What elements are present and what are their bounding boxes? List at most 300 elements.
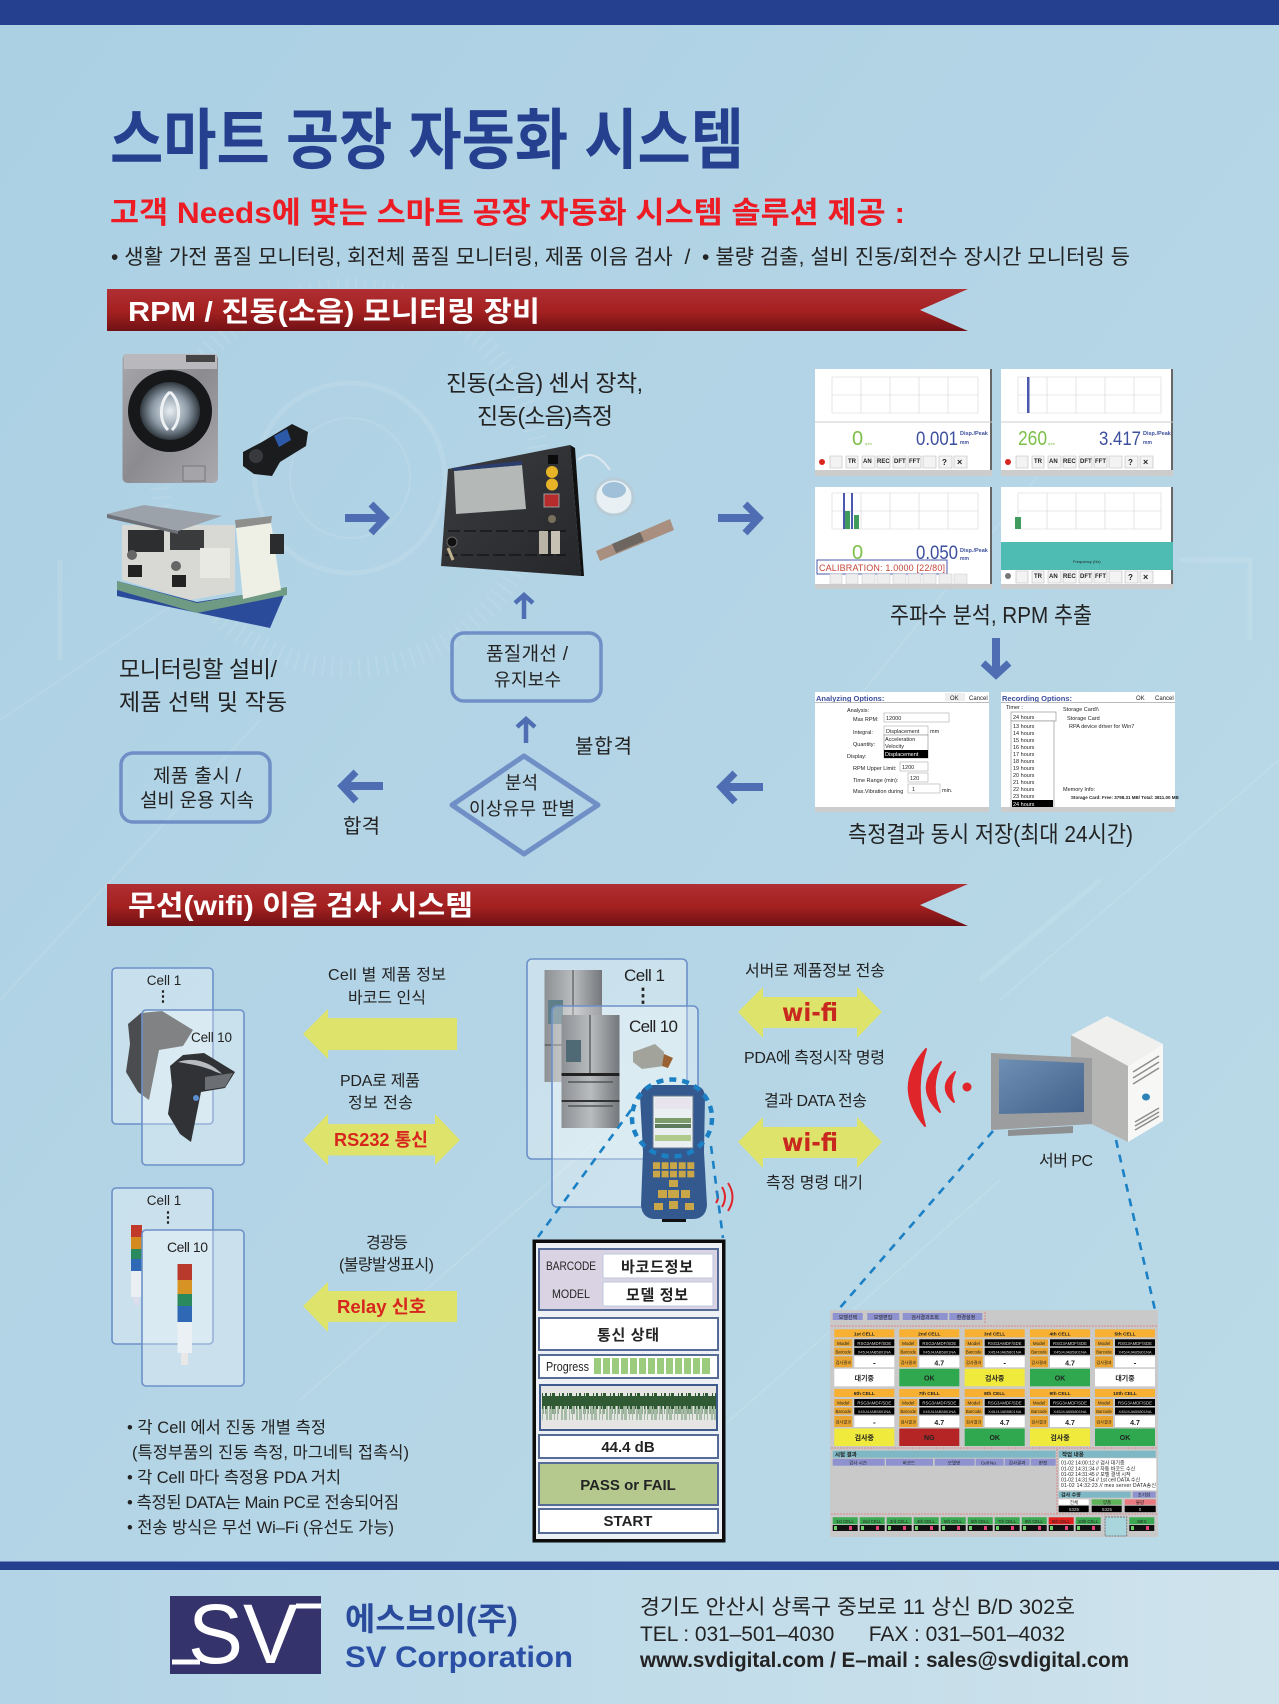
level reading: 44.4 dB	[601, 1439, 655, 1456]
screen 2: ×	[1143, 457, 1148, 467]
screen 2: DFT	[1080, 459, 1092, 465]
cell status strip: 7th CELL	[998, 1519, 1017, 1524]
cell status strip: 1st CELL	[836, 1519, 854, 1524]
screen 4: ×	[1143, 572, 1148, 582]
dashboard tabs: 모델선택	[839, 1314, 858, 1321]
cells row 2: Barcode	[1031, 1409, 1047, 1414]
monitor	[991, 1053, 1092, 1136]
cells row 1: 4.7	[934, 1360, 944, 1367]
test results table: 모델명	[948, 1460, 960, 1466]
cells row 1: 2nd CELL	[918, 1332, 941, 1338]
recording options: 20 hours	[1013, 773, 1035, 779]
work log: 01-02 14:31:34 // 자동 바코드 수신	[1061, 1466, 1136, 1472]
cell status strip: 2nd CELL	[862, 1519, 882, 1524]
cells row 1: Barcode	[900, 1349, 917, 1354]
progress	[539, 1355, 718, 1378]
cells row 1: 1st CELL	[854, 1332, 875, 1338]
label: store results: 측정결과 동시 저장(최대 24시간)	[848, 821, 1133, 847]
cells row 2: RSG3AMDF/SDE	[1118, 1400, 1152, 1406]
panel: PDA screen detail	[532, 1240, 726, 1542]
company name: SV Corporation	[345, 1641, 573, 1674]
contact info	[639, 1596, 1129, 1672]
cells row 2: NG	[924, 1435, 935, 1442]
decision: analysis: 분석	[505, 773, 538, 793]
analyzing options: Cancel	[969, 696, 988, 702]
label: frequency analysis: 주파수 분석, RPM 추출	[890, 602, 1092, 628]
cells row 1: OK	[1055, 1375, 1065, 1382]
screen 1: FFT	[909, 459, 920, 465]
label: send to PDA: PDA로 제품	[340, 1072, 420, 1090]
notes: • 측정된 DATA는 Main PC로 전송되어짐	[127, 1493, 399, 1512]
cells row 1: Model	[968, 1341, 980, 1346]
cells row 2: 검사결과	[836, 1418, 851, 1426]
screen 2: mm	[1143, 440, 1152, 446]
screen 2: rpm	[1048, 441, 1056, 446]
work log	[1059, 1450, 1156, 1490]
label: attach sensor: 진동(소음) 센서 장착,	[446, 370, 643, 396]
dashboard tabs: 검사결과조회	[911, 1314, 939, 1321]
test results table: 검사 시간	[849, 1460, 867, 1466]
icon: factory machine	[107, 505, 287, 628]
start: START	[604, 1513, 652, 1530]
cells row 1: X45J4JAB5801NA	[923, 1349, 956, 1354]
screen 2: AN	[1049, 459, 1058, 465]
cells row 1: Model	[1033, 1341, 1045, 1346]
cells row 2: 6th CELL	[854, 1391, 875, 1397]
notes: • 각 Cell 마다 측정용 PDA 거치	[127, 1468, 341, 1487]
cells row 2: Model	[902, 1400, 914, 1406]
test results table: 바코드	[903, 1460, 915, 1466]
cells row 1	[834, 1329, 1155, 1386]
communication status: 통신 상태	[597, 1327, 659, 1344]
icon: pump	[243, 424, 308, 476]
cells row 1: RSG3AMDF/SDE	[1053, 1341, 1087, 1346]
cells row 1: 5th CELL	[1114, 1332, 1136, 1338]
recording options: 14 hours	[1013, 731, 1035, 737]
arrow right to screens	[718, 504, 759, 533]
analyzing options: 120	[910, 776, 919, 782]
section banner: wireless inspection: 무선(wifi) 이음 검사 시스템	[128, 890, 473, 921]
label: fail: 불합격	[575, 735, 632, 758]
logo: SV	[188, 1587, 298, 1681]
screen 1: rpm	[865, 441, 873, 446]
test results table: Cell No.	[981, 1460, 997, 1466]
recording options: 21 hours	[1013, 780, 1035, 786]
box: product release: 제품 출시 /	[153, 765, 242, 787]
cells row 1: 4.7	[1065, 1360, 1075, 1367]
cells row 1: 검사결과	[1031, 1359, 1047, 1366]
screen 4: Frequency (Hz)	[1073, 559, 1101, 564]
cells row 2: 4.7	[1130, 1420, 1140, 1427]
label: attach sensor	[446, 370, 643, 429]
analyzing options: 12000	[886, 716, 901, 722]
cells row 2: OK	[1120, 1435, 1130, 1442]
waveform	[540, 1385, 717, 1430]
cells row 1: Model	[1098, 1341, 1110, 1346]
communication status	[539, 1318, 718, 1350]
panel: barcode scanners in cells: Cell 10	[191, 1030, 232, 1045]
cells row 1: X45J4JAB5801NA	[1118, 1349, 1152, 1354]
panel: refrigerators in cells: Cell 1	[624, 966, 665, 985]
screen 2: 3.417	[1099, 429, 1141, 450]
decision: analysis	[452, 756, 598, 854]
cells row 2: 4.7	[1065, 1420, 1075, 1427]
panel: tower lamps in cells: Cell 10	[167, 1239, 208, 1255]
cells row 1: 검사결과	[966, 1359, 982, 1366]
cell status strip: 10th CELL	[1078, 1519, 1099, 1524]
panel: monitoring screens	[815, 369, 1173, 589]
cells row 2: 검사결과	[901, 1418, 916, 1426]
screen 4: REC	[1063, 574, 1076, 580]
screen 1	[815, 369, 992, 476]
screen 3	[815, 487, 992, 589]
inspection count: 5325	[1069, 1507, 1080, 1512]
screen 1: 0.001	[916, 429, 958, 450]
barcode and model: 바코드정보	[621, 1259, 693, 1276]
screen 1: ×	[957, 457, 962, 467]
cells row 2: -	[873, 1418, 876, 1427]
screen 2: Disp./Peak	[1143, 431, 1172, 437]
analyzing options: Acceleration	[885, 737, 915, 743]
cells row 2: Barcode	[966, 1409, 982, 1414]
label: result data: 결과 DATA 전송	[764, 1092, 867, 1110]
arrow: RS232: RS232 통신	[334, 1130, 428, 1150]
label: select equipment: 제품 선택 및 작동	[119, 689, 287, 715]
label: barcode recognition: 바코드 인식	[348, 989, 426, 1007]
recording options: RPA device driver for Win7	[1069, 724, 1134, 730]
icon: vibration sensor part	[633, 1044, 673, 1069]
cells row 1: 대기중	[1115, 1373, 1135, 1382]
cells row 2: X45J4JAB5801NA	[1118, 1409, 1152, 1414]
recording options: 19 hours	[1013, 766, 1035, 772]
screen 3: CALIBRATION: 1.0000 [22/80]	[819, 563, 945, 573]
recording options: Storage Card	[1067, 716, 1100, 722]
title: 스마트 공장 자동화 시스템	[110, 103, 744, 177]
panel: refrigerators in cells: ⋮	[634, 986, 652, 1007]
cells row 2: X45J4JAB5801NA	[1053, 1409, 1087, 1414]
cells row 1: Barcode	[835, 1349, 852, 1354]
cells row 2	[834, 1389, 1155, 1446]
screen 1: REC	[877, 459, 890, 465]
contact info: 경기도 안산시 상록구 중보로 11 상신 B/D 302호	[640, 1596, 1075, 1619]
screen 2: ?	[1128, 458, 1133, 467]
screen 2	[1001, 369, 1173, 476]
arrow: relay	[303, 1282, 457, 1332]
screen 2: 260	[1018, 428, 1047, 450]
recording options: 18 hours	[1013, 759, 1035, 765]
inspection count: 0	[1139, 1507, 1142, 1512]
box: product release	[121, 753, 270, 822]
panel: barcode scanners in cells: Cell 1	[147, 973, 181, 988]
cells row 1: Model	[902, 1341, 914, 1346]
screen 2: REC	[1063, 459, 1076, 465]
panel: refrigerators in cells: Cell 10	[629, 1017, 678, 1036]
analyzing options: 1200	[902, 765, 914, 771]
screen 3: Disp./Peak	[960, 548, 989, 554]
analyzing options: Display:	[847, 754, 867, 760]
screen 3: 0	[852, 542, 863, 564]
cells row 1: 검사결과	[1096, 1359, 1112, 1366]
inspection count: 5325	[1102, 1507, 1113, 1512]
decision: analysis: 이상유무 판별	[469, 799, 575, 819]
cells row 1: 3rd CELL	[984, 1332, 1005, 1338]
test results table: 시험 결과	[835, 1450, 857, 1458]
arrow: relay: Relay 신호	[337, 1297, 426, 1317]
recording options: Cancel	[1155, 696, 1174, 702]
box: quality improvement: 품질개선 /	[486, 643, 569, 665]
recording options: 16 hours	[1013, 745, 1035, 751]
analyzing options: min.	[942, 788, 953, 794]
box: quality improvement	[452, 633, 601, 701]
recording options: Storage Card\\	[1063, 707, 1099, 713]
cells row 2: Barcode	[1096, 1409, 1112, 1414]
cells row 1: -	[1134, 1358, 1137, 1367]
arrow down	[983, 638, 1009, 675]
section banner: RPM monitoring: RPM / 진동(소음) 모니터링 장비	[128, 296, 540, 327]
arrow: wifi lower	[738, 1117, 882, 1168]
arrow right	[345, 504, 385, 533]
cells row 2: 검사결과	[1096, 1418, 1112, 1426]
analyzing options	[815, 692, 989, 812]
cells row 1: -	[1003, 1358, 1006, 1367]
notes: (특정부품의 진동 측정, 마그네틱 접촉식)	[132, 1443, 409, 1462]
top bar	[0, 0, 1279, 25]
panel: tower lamps in cells	[112, 1188, 244, 1386]
panel: option screens	[815, 692, 1179, 812]
analyzing options: Analyzing Options:	[816, 694, 884, 703]
panel: tower lamps in cells: ⋮	[160, 1209, 176, 1226]
panel: server dashboard	[830, 1310, 1158, 1537]
recording options: 24 hours	[1013, 802, 1035, 808]
screen 4: AN	[1049, 574, 1058, 580]
icon: PDA wireless signal	[716, 1183, 732, 1211]
cells row 2: X45J4JAB5801NA	[923, 1409, 956, 1414]
inspection count: 전체	[1070, 1499, 1078, 1506]
summary line: • 생활 가전 품질 모니터링, 회전체 품질 모니터링, 제품 이음 검사 / • 불량 검출, 설비 진동/회전수 장시간 모니터링 등	[111, 246, 1130, 269]
panel: barcode scanners in cells	[112, 968, 244, 1165]
cells row 1: X45J4JAB5801NA	[858, 1349, 891, 1354]
callout lines: PDA screen	[538, 1110, 723, 1238]
contact info: www.svdigital.com / E–mail : sales@svdigital.com	[639, 1649, 1129, 1672]
cells row 2: OK	[989, 1435, 1000, 1442]
screen 1: 0	[852, 428, 863, 450]
notes	[127, 1418, 409, 1537]
analyzing options: mm	[930, 729, 940, 735]
analyzing options: Analysis:	[847, 708, 869, 714]
dashboard tabs	[833, 1313, 982, 1321]
recording options: 23 hours	[1013, 794, 1035, 800]
arrow left to analysis	[721, 773, 763, 802]
arrow: wifi upper: wi-fi	[782, 998, 838, 1027]
cells row 1: RSG3AMDF/SDE	[857, 1341, 891, 1346]
work log: 01-02 14:32:23 // mes server DATA송신	[1061, 1482, 1156, 1489]
arrow up to quality box	[517, 719, 535, 743]
cells row 1: Barcode	[1096, 1349, 1112, 1354]
footer band	[0, 1562, 1279, 1704]
pass or fail	[539, 1463, 718, 1505]
cells row 1: Barcode	[1031, 1349, 1047, 1354]
analyzing options: Max.Vibration during	[853, 789, 903, 795]
panel: tower lamps in cells: Cell 1	[147, 1193, 181, 1208]
cells row 1: X45J4JAB5801NA	[988, 1349, 1022, 1354]
icon: server PC	[991, 1016, 1163, 1142]
company name: 에스브이(주)	[345, 1601, 518, 1637]
notes: • 각 Cell 에서 진동 개별 측정	[127, 1418, 326, 1437]
cells row 2: RSG3AMDF/SDE	[922, 1400, 956, 1406]
cell status strip: 4th CELL	[917, 1519, 936, 1524]
barcode and model	[539, 1249, 718, 1310]
cells row 2: 10th CELL	[1113, 1391, 1137, 1397]
panel: products to monitor	[107, 354, 308, 715]
label: tower lamp: 경광등	[366, 1234, 408, 1252]
label: send product info: 서버로 제품정보 전송	[745, 962, 885, 980]
recording options: Memory Info:	[1063, 787, 1096, 793]
recording options: 13 hours	[1013, 724, 1035, 730]
icon: vibration measuring device	[441, 445, 674, 576]
cells row 2: RSG3AMDF/SDE	[988, 1400, 1022, 1406]
cells row 2: RSG3AMDF/SDE	[1053, 1400, 1087, 1406]
work log: 작업 내용	[1062, 1450, 1084, 1458]
screen 3: mm	[960, 556, 969, 562]
cells row 1: -	[873, 1358, 876, 1367]
cells row 1: 검사결과	[901, 1359, 916, 1366]
screen 3: 0.050	[916, 543, 958, 564]
arrow up to device	[515, 595, 533, 619]
box: product release: 설비 운용 지속	[140, 790, 254, 812]
cells row 2: Barcode	[835, 1409, 852, 1414]
icon: refrigerator 1	[544, 970, 602, 1082]
label: tower lamp	[339, 1234, 434, 1274]
screen 4: FFT	[1095, 574, 1106, 580]
screen 4	[1001, 487, 1173, 589]
test results table	[833, 1450, 1056, 1466]
panel: barcode scanners in cells: ⋮	[156, 988, 170, 1005]
cells row 2: 검사중	[855, 1433, 875, 1442]
recording options: 22 hours	[1013, 787, 1035, 793]
tower	[1071, 1016, 1163, 1142]
label: send to PDA: 정보 전송	[348, 1094, 413, 1112]
label: standby: 측정 명령 대기	[766, 1174, 863, 1192]
subtitle: 고객 Needs에 맞는 스마트 공장 자동화 시스템 솔루션 제공 :	[110, 197, 905, 230]
start	[539, 1509, 718, 1533]
screen 4: DFT	[1080, 574, 1092, 580]
label: select equipment: 모니터링할 설비/	[119, 656, 278, 682]
barcode and model: MODEL	[552, 1287, 590, 1301]
arrow: wifi upper	[738, 987, 882, 1038]
cells row 2: 4.7	[1000, 1420, 1010, 1427]
analyzing options: RPM Upper Limit:	[853, 766, 897, 772]
work log: 01-02 14:00:12 // 검사 대기중	[1061, 1460, 1125, 1466]
screen 1: ?	[942, 458, 947, 467]
analyzing options: Displacement	[885, 752, 919, 758]
contact info: TEL : 031–501–4030 FAX : 031–501–4032	[640, 1623, 1065, 1646]
cells row 1: 검사중	[985, 1373, 1005, 1382]
recording options: Recording Options:	[1002, 694, 1072, 703]
cells row 2: 7th CELL	[919, 1391, 940, 1397]
label: start command: PDA에 측정시작 명령	[744, 1049, 885, 1067]
section banner: RPM monitoring	[107, 289, 968, 331]
cells row 2: X45J4JAB5801NA	[858, 1409, 891, 1414]
cell status strip: 8th CELL	[1025, 1519, 1044, 1524]
analyzing options: Quantity:	[853, 742, 875, 748]
icon: refrigerator 2	[562, 1015, 620, 1128]
cells row 1: X45J4JAB5801NA	[1053, 1349, 1087, 1354]
analyzing options: Integral:	[853, 730, 873, 736]
screen 1: DFT	[894, 459, 906, 465]
cells row 2: 검사결과	[966, 1418, 982, 1426]
recording options: 15 hours	[1013, 738, 1035, 744]
screen 2: TR	[1034, 459, 1043, 465]
panel: refrigerators in cells	[527, 959, 698, 1207]
inspection count: 초기화	[1138, 1492, 1150, 1498]
arrow: RS232	[303, 1114, 460, 1165]
arrow left to release	[342, 772, 383, 801]
barcode and model: BARCODE	[546, 1259, 596, 1273]
arrow: barcode	[303, 1009, 457, 1059]
section banner: wireless inspection	[107, 884, 968, 926]
dashboard tabs: 모델편집	[874, 1314, 892, 1321]
recording options: 17 hours	[1013, 752, 1035, 758]
inspection count: 검사 수량	[1061, 1492, 1081, 1498]
cells row 2: 검사결과	[1031, 1418, 1047, 1426]
recording options	[1001, 692, 1179, 812]
label: select equipment	[119, 656, 287, 715]
label: barcode recognition: Cell 별 제품 정보	[328, 966, 446, 984]
cell status strip: MES	[1137, 1519, 1147, 1524]
label: barcode recognition	[328, 966, 446, 1007]
notes: • 전송 방식은 무선 Wi–Fi (유선도 가능)	[127, 1518, 394, 1537]
analyzing options: 1	[912, 787, 915, 793]
arrow: wifi lower: wi-fi	[782, 1128, 838, 1157]
cells row 1: RSG3AMDF/SDE	[988, 1341, 1022, 1346]
label: attach sensor: 진동(소음)측정	[477, 403, 613, 429]
screen 1: mm	[960, 440, 969, 446]
cells row 1: 검사결과	[836, 1359, 851, 1366]
pass or fail: PASS or FAIL	[580, 1477, 676, 1494]
screen 2: FFT	[1095, 459, 1106, 465]
cells row 2: Model	[1098, 1400, 1110, 1406]
cells row 2: Model	[1033, 1400, 1045, 1406]
label: server PC: 서버 PC	[1039, 1152, 1093, 1170]
analyzing options: Displacement	[886, 729, 920, 735]
analyzing options: OK	[950, 696, 959, 702]
cells row 1: RSG3AMDF/SDE	[1118, 1341, 1152, 1346]
recording options: Timer :	[1006, 705, 1023, 711]
cells row 1: Model	[837, 1341, 849, 1346]
cell status strip: 5th CELL	[944, 1519, 963, 1524]
screen 1: Disp./Peak	[960, 431, 989, 437]
box: quality improvement: 유지보수	[494, 670, 561, 690]
cells row 1: Barcode	[966, 1349, 982, 1354]
cells row 1: RSG3AMDF/SDE	[922, 1341, 956, 1346]
analyzing options: Max RPM:	[853, 717, 879, 723]
label: send to PDA	[340, 1072, 420, 1112]
dashboard tabs: 환경설정	[957, 1314, 975, 1321]
work log: 01-02 14:31:54 // 1st cell DATA 수신	[1061, 1476, 1140, 1484]
cells row 2: X45J4JAB5801NA	[988, 1409, 1022, 1414]
cells row 2: 8th CELL	[984, 1391, 1005, 1397]
cells row 2: 4.7	[934, 1420, 944, 1427]
recording options: 24 hours	[1013, 715, 1035, 721]
screen 4: ?	[1128, 573, 1133, 582]
recording options: Storage Card: Free: 3798.31 MB/ Total: 3811.00 MB	[1071, 795, 1179, 800]
cells row 1: 대기중	[855, 1373, 875, 1382]
cells row 1: 4th CELL	[1049, 1332, 1071, 1338]
screen 1: AN	[863, 459, 872, 465]
cells row 1: OK	[924, 1375, 935, 1382]
analyzing options: Velocity	[885, 744, 904, 750]
level reading	[539, 1435, 718, 1458]
